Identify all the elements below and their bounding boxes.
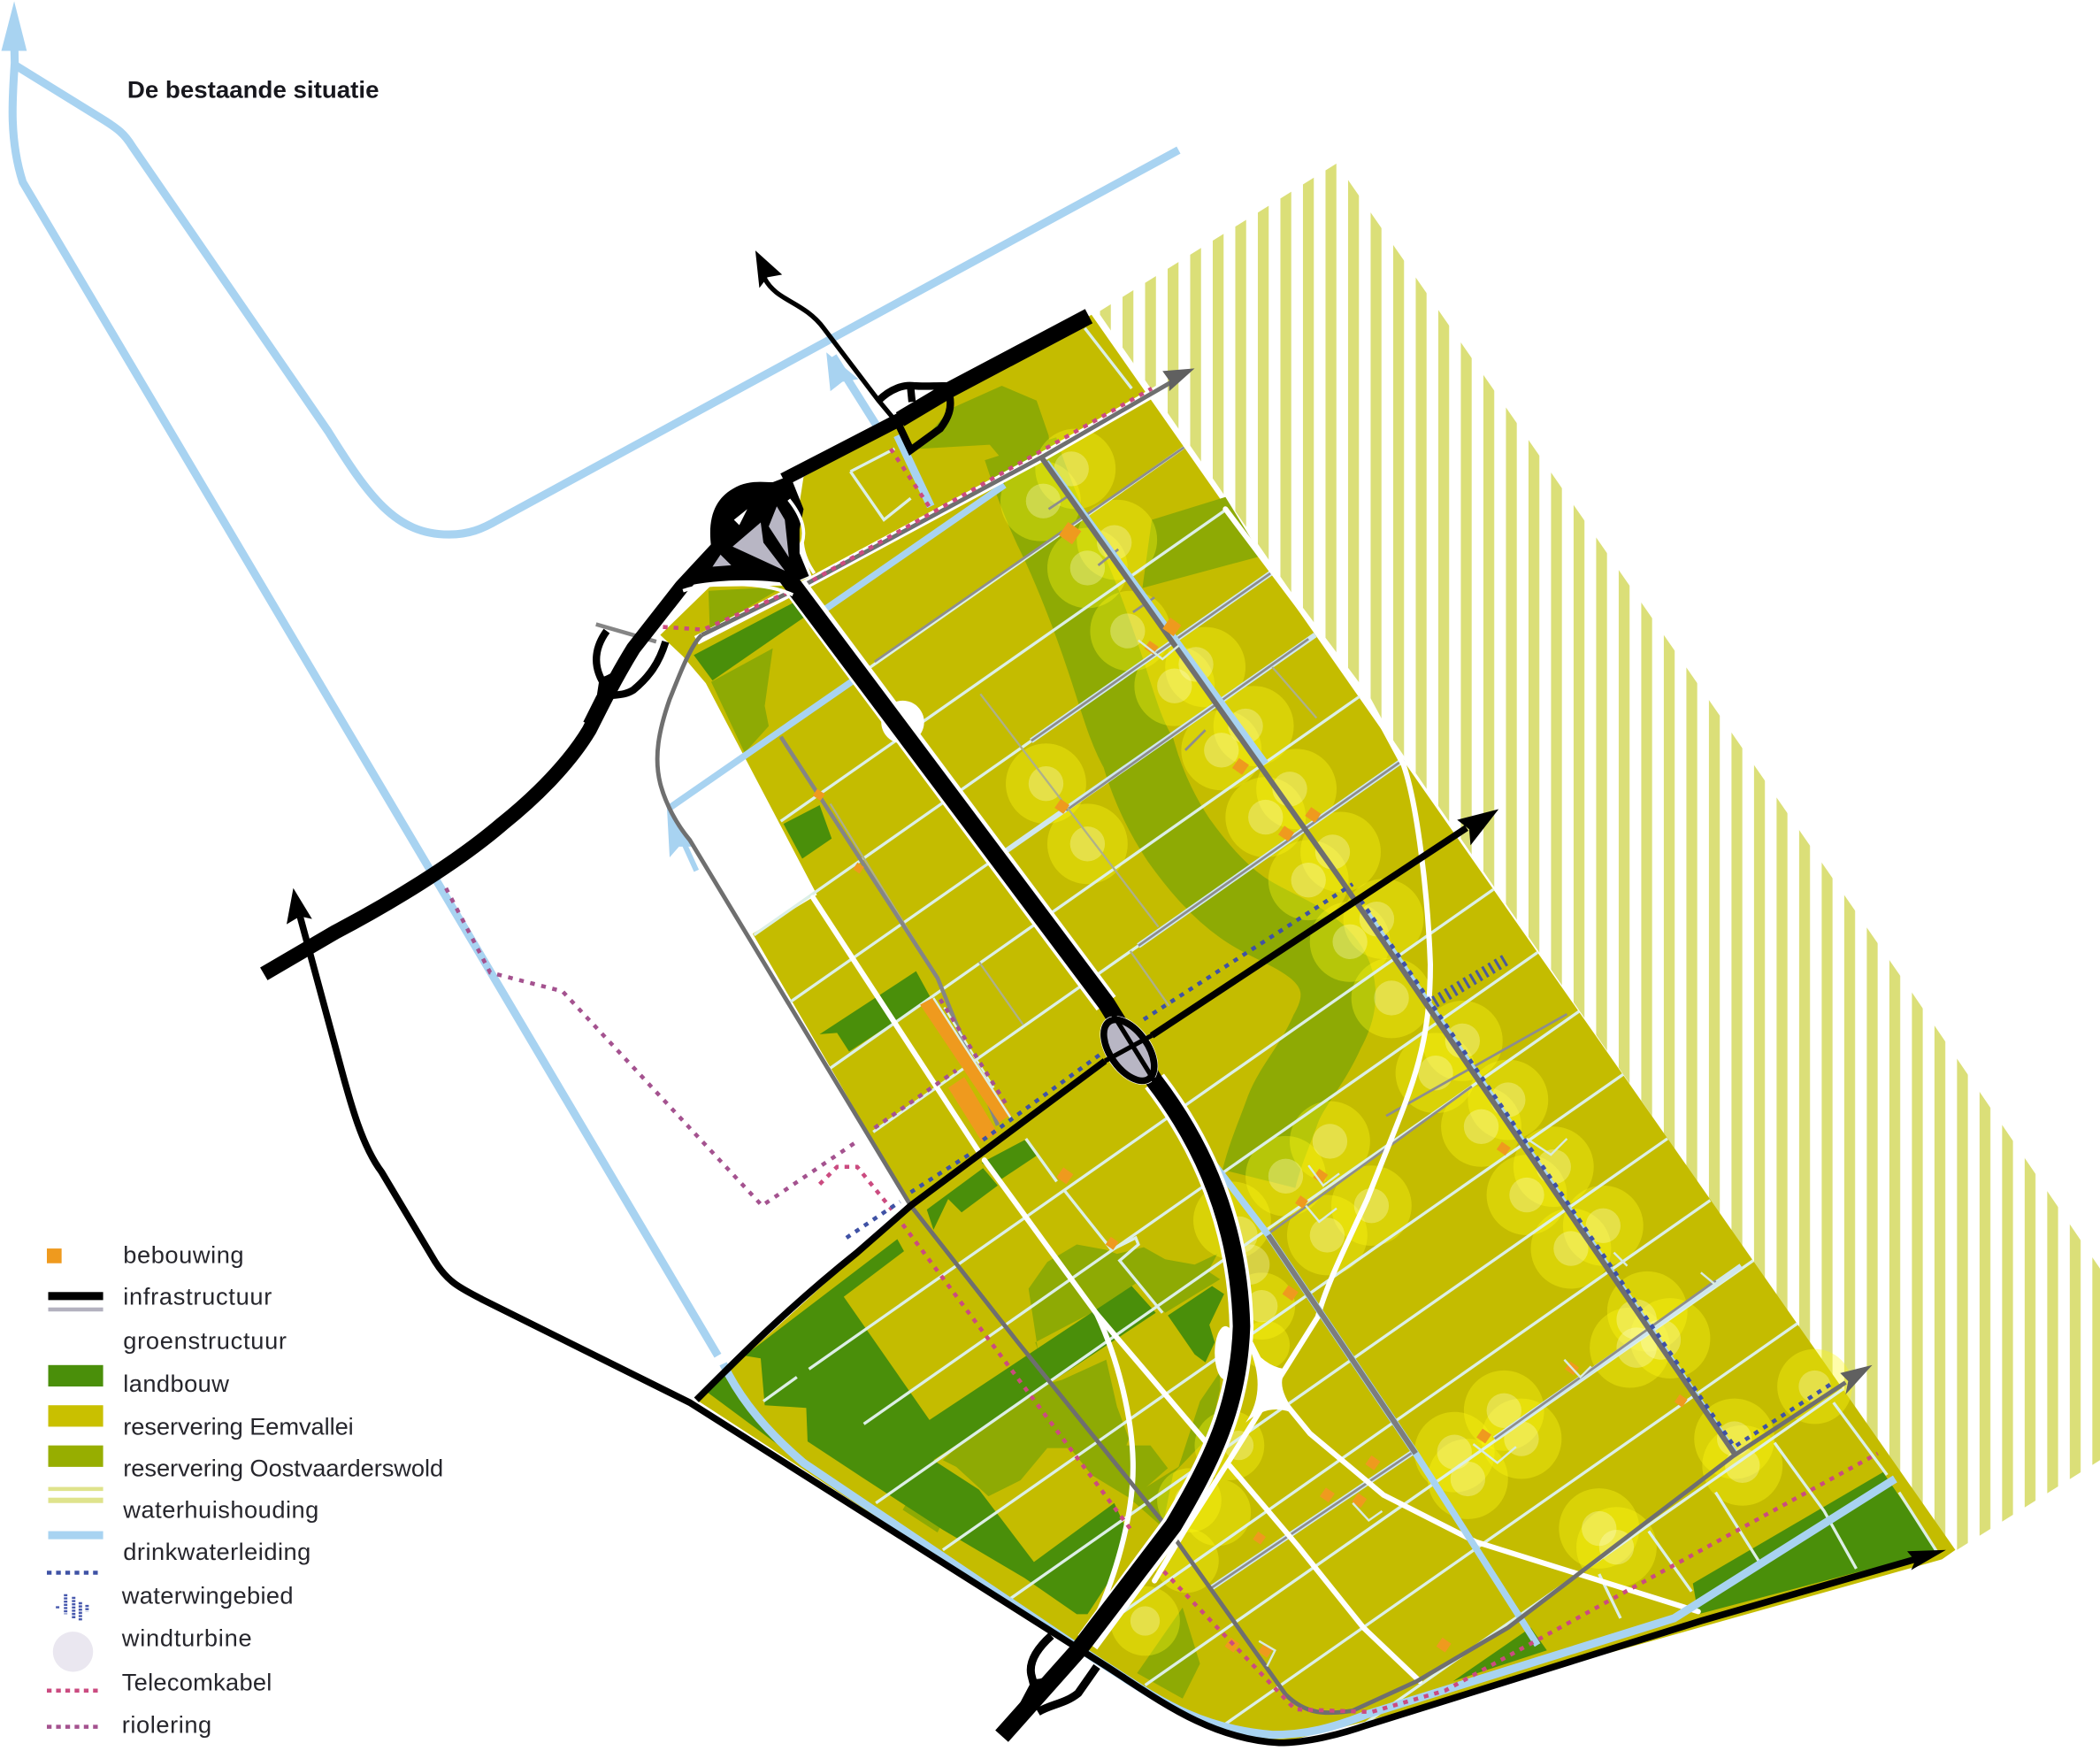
- legend: waterhuishouding: [49, 1487, 318, 1523]
- legend: bebouwing: bebouwing: [123, 1241, 244, 1269]
- legend: riolering: riolering: [122, 1710, 211, 1738]
- title: De bestaande situatie: [127, 77, 379, 104]
- legend: Telecomkabel: Telecomkabel: [122, 1669, 272, 1696]
- legend: windturbine: windturbine: [121, 1624, 252, 1652]
- interchange: large knot with grey islands: [683, 475, 815, 595]
- ditches and field lanes: [670, 328, 1936, 1727]
- sewer line outside the map: [446, 888, 857, 1206]
- interchange: western junction: [586, 631, 665, 724]
- landbouw agricultural parcels: [694, 600, 1936, 1681]
- waterhuishouding stripes: reserve area: [1099, 164, 2100, 1553]
- grey secondary roads: [596, 368, 1873, 1713]
- legend: bebouwing: [47, 1241, 244, 1269]
- legend: drinkwaterleiding: [49, 1532, 310, 1565]
- legend: reservering Eemvallei: [49, 1405, 354, 1440]
- interchange: central node with grey ellipse: [1088, 1003, 1170, 1095]
- legend: blue dotted pipe: [47, 1571, 99, 1574]
- waterwingebied hatch: [1435, 959, 1506, 1002]
- legend: [47, 1241, 443, 1738]
- drinkwaterleiding inside the map: [667, 352, 1895, 1735]
- groenstructuur white green corridors: [813, 509, 1698, 1681]
- legend: landbouw: [49, 1365, 229, 1397]
- dark-blue water pipe dots: [847, 884, 1834, 1447]
- windturbine clusters: [1000, 428, 1852, 1655]
- legend: infrastructuur: infrastructuur: [123, 1283, 272, 1310]
- interchange: top-right junction: [878, 386, 954, 450]
- drinking water main with arrow: [2, 2, 1178, 1355]
- riolering dotted route inside the map: [875, 999, 1008, 1128]
- highway network black roads: [264, 250, 1946, 1743]
- legend: waterwingebied: waterwingebied: [121, 1581, 294, 1609]
- legend: waterwingebied: [57, 1581, 294, 1621]
- legend: windturbine: [53, 1624, 252, 1672]
- legend: reservering Oostvaarderswold: [49, 1446, 443, 1481]
- legend: infrastructuur: [49, 1283, 272, 1311]
- telecomkabel dotted route: [663, 388, 1878, 1712]
- legend: drinkwaterleiding: drinkwaterleiding: [123, 1538, 310, 1565]
- reservering Oostvaarderswold zones: [709, 386, 1338, 1699]
- legend: reservering Oostvaarderswold: reservering Oostvaarderswold: [123, 1454, 443, 1481]
- legend: reservering Eemvallei: reservering Eemvallei: [123, 1413, 354, 1440]
- built strip along the middle road: [920, 998, 1011, 1141]
- interchange: southern junction: [1022, 1636, 1097, 1712]
- legend: groenstructuur: groenstructuur: [123, 1327, 287, 1355]
- map base: reservering Eemvallei field: [660, 315, 1955, 1741]
- legend: waterhuishouding: waterhuishouding: [122, 1495, 318, 1523]
- legend: landbouw: landbouw: [123, 1370, 229, 1397]
- bebouwing orange buildings: [813, 522, 1730, 1666]
